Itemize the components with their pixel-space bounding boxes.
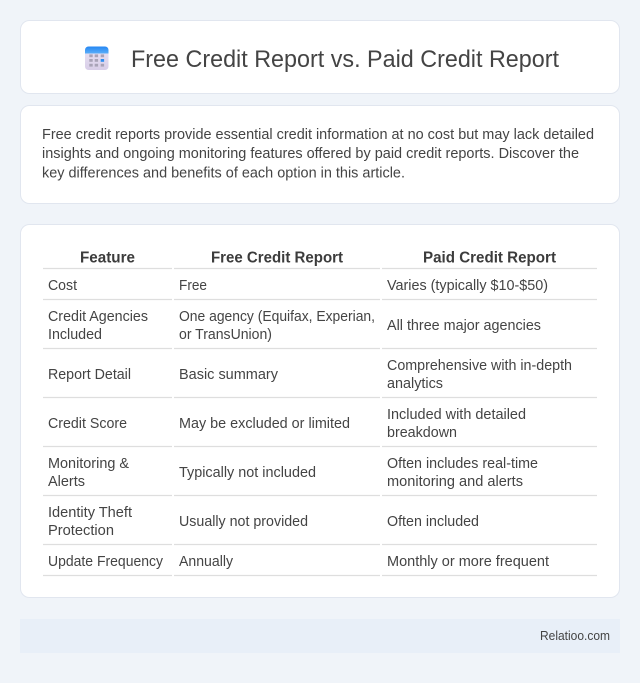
row: identity theft protection — [48, 505, 479, 539]
table header — [80, 250, 556, 266]
row: credit agencies: or TransUnion) — [179, 327, 272, 343]
table header: Paid Credit Report — [423, 250, 556, 266]
row: report detail — [48, 358, 572, 392]
row: update frequency: Update Frequency — [48, 554, 164, 570]
row: identity theft protection: Identity Theft — [48, 505, 132, 521]
row: report detail: Basic summary — [179, 367, 279, 383]
row: update frequency — [48, 554, 549, 570]
panel: comparison table — [20, 224, 620, 598]
row: report detail: analytics — [387, 376, 443, 392]
row: credit agencies — [48, 309, 541, 343]
row: identity theft protection: Often included — [387, 514, 479, 530]
intro text: key differences and benefits of each option in this article. — [42, 166, 405, 182]
icon: calendar — [85, 46, 108, 70]
row: cost: Varies (typically $10-$50) — [387, 278, 548, 294]
table header: Feature — [80, 250, 135, 266]
table header: Free Credit Report — [211, 250, 343, 266]
row: identity theft protection: Usually not provided — [179, 514, 308, 530]
row: credit score: breakdown — [387, 425, 457, 441]
row: cost: Cost — [48, 278, 77, 294]
row: report detail: Comprehensive with in-depth — [387, 358, 572, 374]
row: credit agencies: Credit Agencies — [48, 309, 148, 325]
title text: Free Credit Report vs. Paid Credit Report — [131, 46, 559, 73]
footer text: Relatioo.com — [540, 629, 610, 643]
row: update frequency: Monthly or more frequent — [387, 554, 549, 570]
row: report detail: Report Detail — [48, 367, 131, 383]
row: monitoring and alerts: Alerts — [48, 474, 85, 490]
row: cost: Free — [179, 278, 207, 294]
row: cost — [48, 278, 548, 294]
intro text: Free credit reports provide essential credit information at no cost but may lack detailed — [42, 127, 594, 143]
row: credit agencies: Included — [48, 327, 102, 343]
row: credit agencies: All three major agencies — [387, 318, 541, 334]
row: credit score: Included with detailed — [387, 407, 526, 423]
panel: title — [20, 20, 620, 94]
intro text: insights and ongoing monitoring features offered by paid credit reports. Discover the — [42, 146, 579, 162]
row: credit agencies: One agency (Equifax, Experian, — [179, 309, 375, 325]
row: update frequency: Annually — [179, 554, 234, 570]
row: monitoring and alerts: Typically not included — [179, 465, 316, 481]
row: credit score — [48, 407, 526, 441]
panel: introduction — [20, 106, 620, 204]
row: monitoring and alerts — [48, 456, 538, 490]
row: monitoring and alerts: Monitoring & — [48, 456, 129, 472]
intro text — [42, 127, 594, 182]
row: monitoring and alerts: Often includes real-time — [387, 456, 538, 472]
footer — [20, 619, 620, 653]
row: credit score: Credit Score — [48, 416, 127, 432]
row: credit score: May be excluded or limited — [179, 416, 350, 432]
row: monitoring and alerts: monitoring and alerts — [387, 474, 523, 490]
row: identity theft protection: Protection — [48, 523, 114, 539]
